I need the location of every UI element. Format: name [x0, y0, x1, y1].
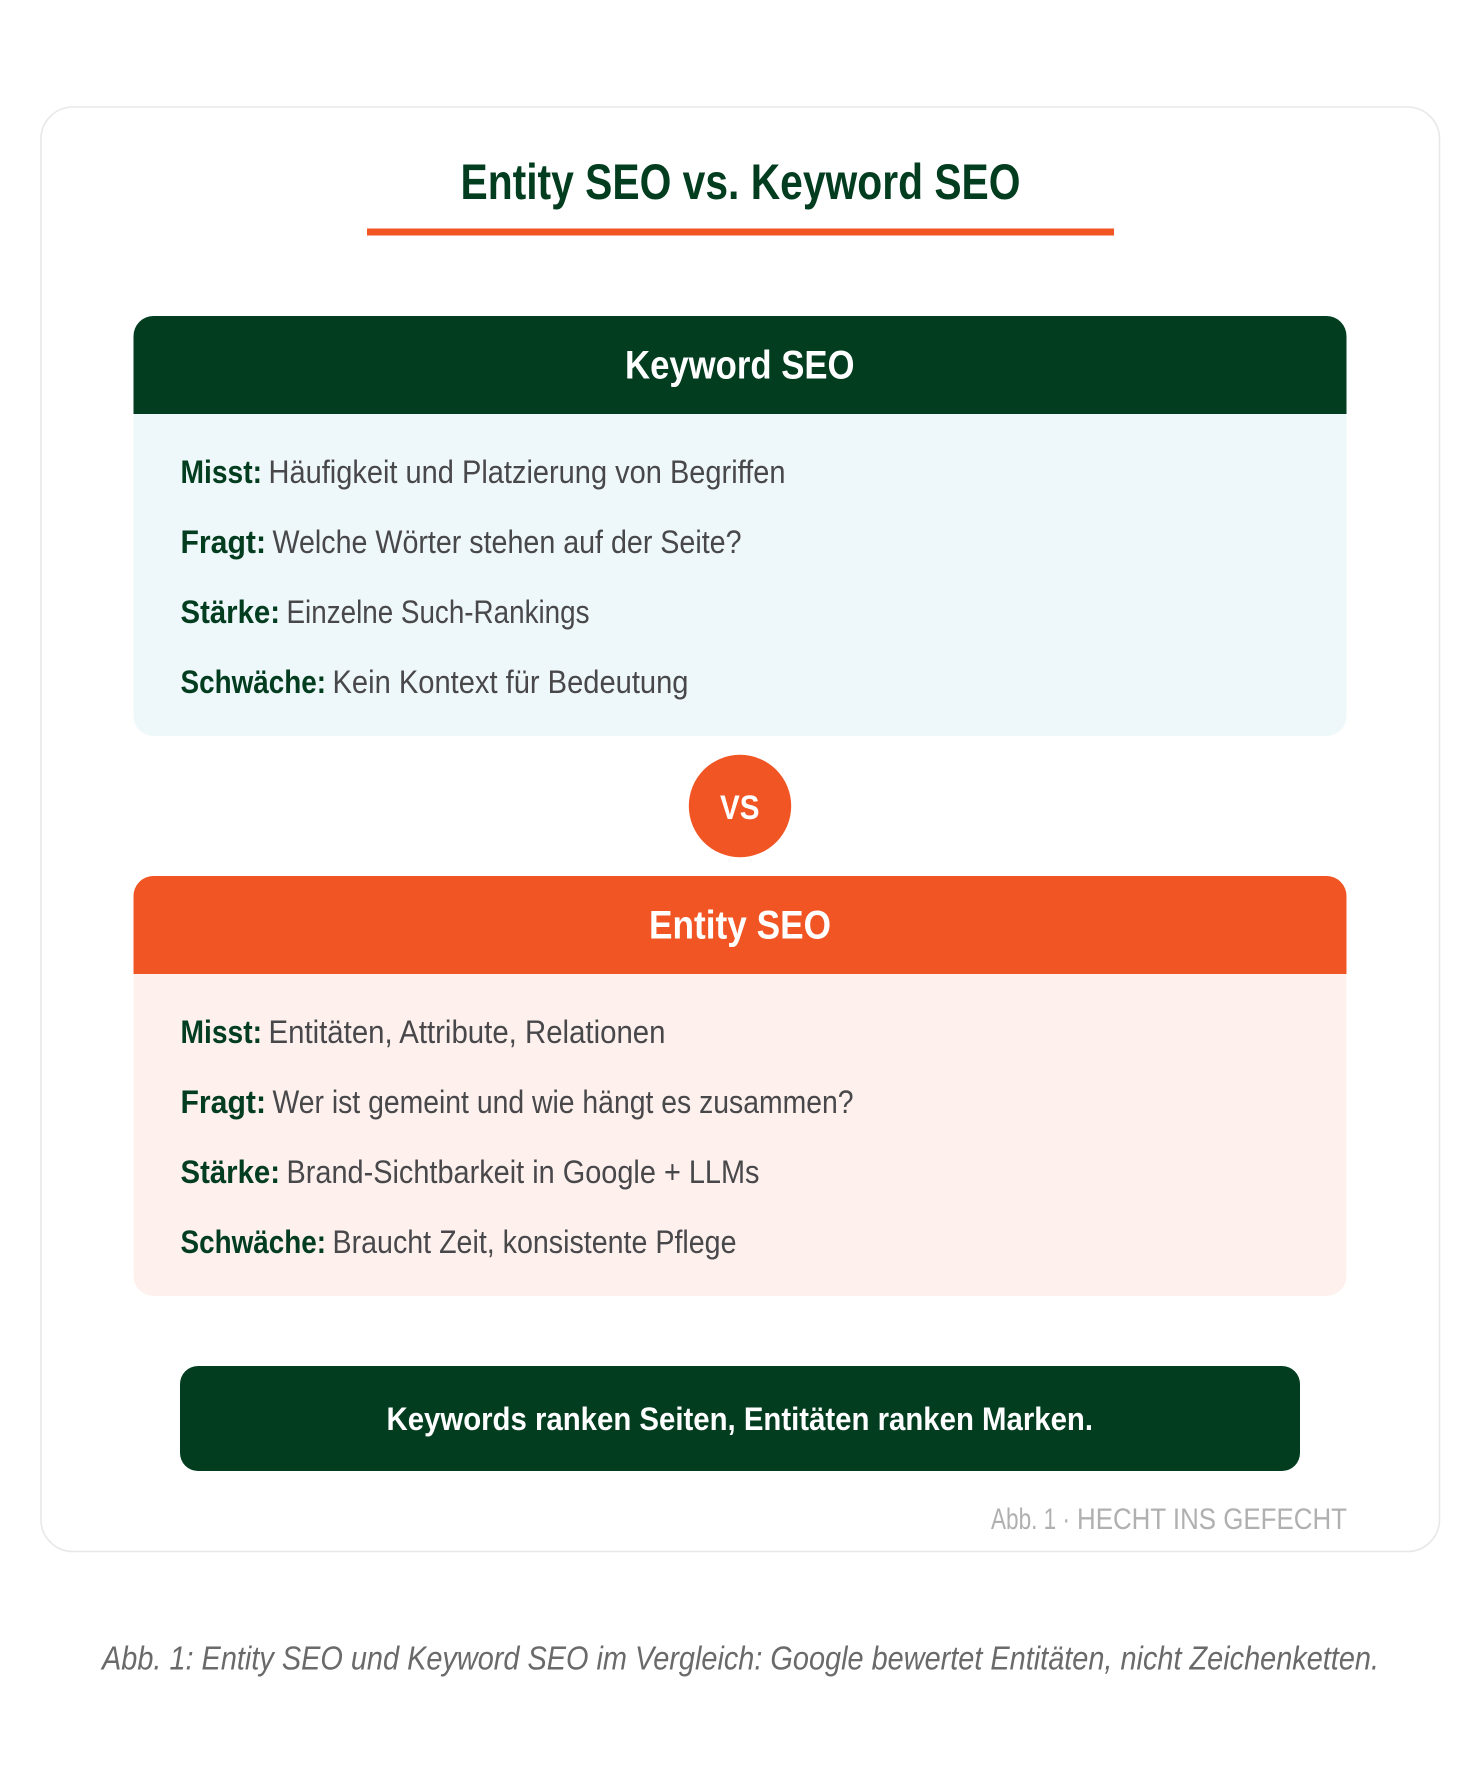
panel heading: Keyword SEO: [625, 344, 854, 388]
row: Misst: Misst:: [180, 454, 262, 490]
row: Stärke: Stärke:: [180, 1154, 280, 1190]
row: Misst: Entitäten, Attribute, Relationen: [268, 1014, 666, 1050]
figure credit: [991, 1503, 1347, 1536]
card: [41, 107, 1440, 1552]
row: Stärke: Einzelne Such-Rankings: [286, 594, 590, 630]
row: Fragt: Welche Wörter stehen auf der Seite?: [272, 524, 742, 560]
vs badge: [689, 755, 791, 857]
vs badge: VS: [720, 789, 760, 827]
row: Stärke: Stärke:: [180, 594, 280, 630]
panel header: [134, 316, 1346, 414]
row: Schwäche: Braucht Zeit, konsistente Pflege: [332, 1224, 736, 1260]
panel body: [134, 876, 1346, 1296]
row: Fragt: Wer ist gemeint und wie hängt es zusammen?: [272, 1084, 854, 1120]
row: Stärke: [180, 594, 590, 630]
row: Schwäche: Schwäche:: [180, 664, 326, 700]
figure credit: Abb. 1 ·: [991, 1503, 1070, 1536]
title: Entity SEO vs. Keyword SEO: [460, 154, 1020, 210]
panel header: [134, 876, 1346, 974]
takeaway banner: [180, 1366, 1300, 1471]
row: Schwäche: [180, 664, 688, 700]
row: Misst: Misst:: [180, 1014, 262, 1050]
panel: Keyword SEO: [134, 316, 1346, 736]
row: Schwäche: Kein Kontext für Bedeutung: [332, 664, 688, 700]
panel: Entity SEO: [134, 876, 1346, 1296]
row: Misst: Häufigkeit und Platzierung von Begriffen: [268, 454, 786, 490]
figure credit: HECHT INS GEFECHT: [1077, 1503, 1347, 1536]
row: Schwäche: Schwäche:: [180, 1224, 326, 1260]
takeaway banner: Keywords ranken Seiten, Entitäten ranken Marken.: [386, 1401, 1093, 1437]
row: Stärke: Brand-Sichtbarkeit in Google + LLMs: [286, 1154, 760, 1190]
row: Schwäche: [180, 1224, 736, 1260]
title underline: [367, 228, 1114, 236]
row: Fragt: Fragt:: [180, 1084, 266, 1120]
row: Fragt: Fragt:: [180, 524, 266, 560]
panel body: [134, 316, 1346, 736]
panel heading: Entity SEO: [649, 904, 831, 948]
